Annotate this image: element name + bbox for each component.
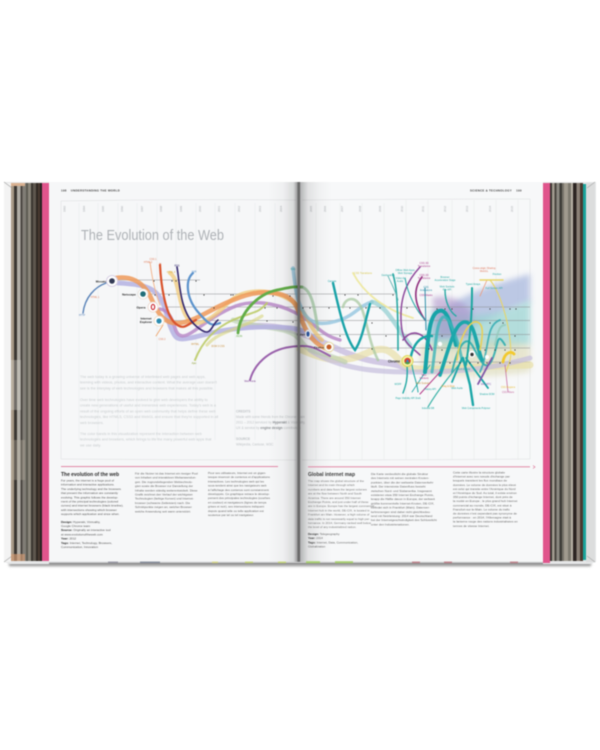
- article text: German, map: läuft. Der intensivste Datenfluss besteht: [371, 485, 426, 489]
- article text: English, map: Frankfurt am Main. However, a high volume of: [308, 513, 370, 517]
- article text: English, map: Internet and its main through which: [308, 483, 355, 487]
- article text: English: The underlying technology and the browsers: [61, 487, 121, 491]
- browser node: Mosaic: Mosaic: [96, 280, 107, 284]
- header: right page: SCIENCE & TECHNOLOGY 199: [470, 188, 522, 192]
- article text: German, map: existieren etwa 350 Internet Exchange Points,: [371, 493, 434, 497]
- year labels: 2008: [358, 205, 362, 212]
- credits block: SOURCE: [236, 437, 251, 441]
- article heading: global internet map: Global internet map: [308, 472, 355, 478]
- article text: French, map: la moitié en Europe ; le plus grand hub Internet: [453, 499, 517, 503]
- article text: German, map: kehrsmengen sind dabei nicht gleichbedeu-: [371, 510, 431, 514]
- article text: German, map: des Internets mit seinen zentralen Knoten-: [371, 476, 429, 480]
- intro text block: The web today is a growing universe of interlinked web pages and web apps,: [80, 375, 206, 379]
- article text: French, map: performance : en 2014, l'Allemagne était à: [453, 516, 511, 520]
- article heading: evolution of the web: The evolution of the web: [61, 472, 119, 478]
- technology labels, upper left: XHTML: [191, 343, 200, 346]
- article text: French: en couleur) et navigateurs (lignes de temps: [208, 500, 267, 504]
- article text: English, map: Internet hub in the world, DE-CIX, is located in: [308, 508, 370, 512]
- teal fan under chrome: [403, 366, 407, 393]
- article text: German, map: tend mit Netzleistung: 2014 war Deutschland: [371, 514, 433, 518]
- intro text block: technologies, like HTML5, CSS3 and WebGL and ensure that they're supported in all: [80, 415, 218, 419]
- article text: German: Grafik zeichnet den Verlauf der wichtigsten: [135, 492, 193, 496]
- browser node: Safari: [297, 330, 311, 338]
- article text: German: Technologien (farbige Kurven) und Internet-: [135, 497, 194, 501]
- intro text block: result of the ongoing efforts of an open web community that helps define these web: [80, 409, 216, 413]
- map metadata: Design: Telegeography: [308, 532, 339, 536]
- technology labels, upper left: HTML 2: [144, 261, 153, 264]
- technology labels, upper right: WebGL: [480, 270, 489, 273]
- technology labels, upper right: Full Screen API: [485, 287, 503, 290]
- year labels: 1997: [140, 205, 144, 212]
- year labels: 1995: [101, 205, 105, 212]
- year labels: 2003: [258, 205, 262, 212]
- browser node: Opera: [137, 302, 158, 312]
- browser node: Internet Explorer: Explorer: [140, 320, 153, 324]
- technology labels, upper left: HTTP: [79, 314, 86, 317]
- article text: French: depuis quand telle ou telle application est: [208, 509, 264, 513]
- article text: German: von Inhalten und interaktiven Webanwendun-: [135, 476, 196, 480]
- article text: English, map: Exchange Points, and just under half of these: [308, 500, 369, 504]
- browser node: Netscape: Netscape: [122, 292, 136, 296]
- article text: French, map: d'Internet avec ses nœuds d'échange par: [453, 475, 510, 479]
- technology labels, upper left: XHR: [191, 270, 197, 274]
- timeline markers: [153, 280, 517, 364]
- article metadata: Source: Originally an interactive tool: [61, 528, 111, 532]
- technology labels, upper right: Offline Web Apps: [395, 269, 415, 272]
- article text: English: with intersections showing which browser: [61, 508, 117, 512]
- page: left: [49, 182, 299, 563]
- technology labels, lower right: [394, 368, 516, 410]
- credits block: CREDITS: [236, 410, 251, 414]
- map metadata: Tags: Internet, Data, Communication,: [308, 540, 358, 544]
- article text: French: pement des principales technologies (courbes: [208, 496, 270, 500]
- gutter shading: [268, 182, 332, 563]
- article text: English, map: formance. In 2014, Germany ranked well below: [308, 521, 372, 525]
- article text: German, map: knapp die Hälfte davon in Europa; der weltweit: [371, 497, 435, 501]
- technology labels, upper right: Browser: [440, 276, 450, 279]
- map metadata: Globalization: [308, 545, 326, 549]
- technology labels, upper left: CSS 2: [159, 338, 166, 341]
- article text: French: grises et noir), ses intersections indiquent: [208, 505, 264, 509]
- article text: French: à l'affichage des contenus sont constamment: [208, 488, 269, 492]
- technology labels, upper right: Video &: [396, 277, 405, 280]
- technology labels, upper right: Canvas: [328, 280, 337, 283]
- article metadata: Design: Hyperakt, Vizzuality,: [61, 520, 100, 524]
- article text: English, map: are in Europe. Europe has the largest commercial: [308, 504, 374, 508]
- year labels: 1999: [179, 205, 183, 212]
- technology labels, upper left: Ajax: [192, 362, 197, 365]
- browser node: Chrome: Chrome: [388, 359, 400, 363]
- intro text block: The color bands in this visualization represent the interaction between web: [80, 432, 202, 436]
- article metadata: Year: 2012: [61, 537, 76, 541]
- technology labels, lower right: Web Sockets: [416, 382, 431, 385]
- technology labels, upper right: CSS Transitions: [354, 272, 373, 275]
- book cover: [4, 182, 596, 564]
- article text: French, map: lesquels transitent les flux mondiaux de: [453, 479, 507, 483]
- technology labels, upper right: [328, 262, 503, 297]
- browser node: Safari: Safari: [297, 332, 305, 336]
- intro text block: create new generations of useful and immersive web experiences. Today's web is a: [80, 404, 217, 408]
- article text: French, map: et l'Amérique du Sud. Au total, il existe environ: [453, 491, 517, 495]
- article text: German: browser (schwarze Zeitleisten) nach. Die: [135, 501, 190, 505]
- year labels: 1996: [120, 205, 124, 212]
- article text: English, map: numbers and data flows the largest volumes: [308, 487, 367, 491]
- mini browser nodes: [438, 342, 489, 359]
- browser timelines: [118, 280, 530, 362]
- technology labels, upper left: CSS 1: [150, 258, 157, 261]
- article text: French, map: termes de vitesse Internet.: [453, 524, 490, 528]
- article text: German: gen. Die zugrundeliegenden Webtechnolo-: [135, 480, 193, 484]
- technology labels, upper left: RSS: [175, 264, 180, 268]
- article text: French: développés. Ce graphique retrace le dévelop-: [208, 492, 270, 496]
- year labels: 2012: [443, 205, 447, 212]
- credits block: Made with some friends from the Chrome team: [236, 415, 305, 419]
- page stack: left: [11, 183, 42, 561]
- article text: French, map: de données n'est cependant pas synonyme de: [453, 512, 517, 516]
- page edge: right teal: [583, 184, 586, 560]
- technology labels, upper right: CSS: [423, 286, 429, 289]
- page: right: [299, 182, 543, 563]
- year labels: 2015: [510, 205, 514, 212]
- article text: German, map: unter den Industrienationen.: [371, 522, 410, 526]
- article text: French: interactives. Les technologies web qui les: [208, 479, 265, 483]
- article text: English: curves) and internet browsers (black timeline),: [61, 504, 123, 508]
- technology labels, lower right: Web: [422, 374, 427, 377]
- year labels: 2010: [400, 205, 404, 212]
- year labels: 2002: [237, 205, 241, 212]
- article text: German, map: Die Karte verdeutlicht die globale Struktur: [371, 472, 428, 476]
- year labels: [62, 205, 514, 212]
- technology labels, lower right: Web Components Polymer: [462, 407, 490, 410]
- technology labels, lower right: Page Visibility API Draft: [395, 397, 421, 400]
- page edge: right pink: [543, 183, 550, 563]
- article text: English, map: data traffic is not necessarily equal to high per-: [308, 517, 370, 521]
- technology labels, upper left: JS: [159, 263, 162, 266]
- pink rule: left: [61, 466, 278, 468]
- technology labels, upper right: Geolocation: [381, 274, 395, 277]
- year labels: 2004: [279, 205, 283, 212]
- technology labels, upper right: Web Storage: [398, 272, 413, 275]
- article text: English, map: America. There are around 350 Internet: [308, 496, 361, 500]
- article text: English, map: the level of any industrialized nation.: [308, 525, 357, 529]
- intro text block: technologies and browsers, which brings to life the many powerful web apps that: [80, 438, 211, 442]
- article text: English: supports which application and since when.: [61, 512, 120, 516]
- browser node: Chrome: [388, 356, 413, 366]
- technology labels, lower right: CSS Filters: [502, 391, 515, 394]
- page bottom edge with colour flecks: [49, 561, 543, 564]
- article text: French, map: la lanterne rouge des nations industrialisées en: [453, 520, 518, 524]
- browser node: Internet Explorer: [140, 316, 164, 326]
- intro text block: see is the interplay of web technologies and browsers that makes all this possible.: [80, 386, 214, 390]
- chart: evolution of the web: [79, 258, 530, 410]
- technology labels, upper right: Web Sockets: [440, 286, 455, 288]
- pink rule: right: [308, 466, 535, 468]
- article metadata: Communication, Innovation: [61, 545, 98, 549]
- article text: French, map: commercial au monde, DE-CIX, est situé à: [453, 503, 512, 507]
- article metadata: Tags: Internet, Technology, Browsers,: [61, 541, 112, 545]
- article metadata: Google Chrome team: [61, 524, 91, 528]
- browser node: Firefox: [314, 342, 334, 352]
- article text: French: sous-tendent ainsi que les navigateurs web: [208, 484, 267, 488]
- technology labels, upper right: Typed Arrays: [466, 283, 481, 286]
- title: The Evolution of the Web: [81, 227, 224, 244]
- article text: German, map: größte kommerzielle Internet-Knoten, DE-CIX,: [371, 501, 434, 505]
- technology labels, lower right: Shadow DOM: [480, 393, 494, 396]
- article text: German: Schnittpunkte zeigen an, welcher Browser: [135, 505, 192, 509]
- browser node: Opera: Opera: [137, 305, 146, 309]
- technology labels, upper right: Transforms: [418, 277, 431, 280]
- intro text block: we use daily.: [80, 443, 101, 447]
- article text: German: welche Anwendung seit wann unterstützt.: [135, 509, 191, 513]
- page edge: left pink: [42, 183, 49, 561]
- article text: English, map: The map shows the global structure of the: [308, 479, 364, 483]
- intro text block: teeming with videos, photos, and interactive content. What the average user doesn't: [80, 381, 217, 385]
- article text: German: Für die Nutzer ist das Internet ein riesiger Pool: [135, 472, 198, 476]
- article text: German: Inhalte werden ständig weiterentwickelt. Diese: [135, 488, 198, 492]
- technology labels, upper right: Animations: [420, 289, 433, 292]
- technology labels, upper right: Acceleration Stage: [434, 279, 456, 282]
- technology labels, lower right: Touch Events: [456, 368, 471, 371]
- year labels: 2014: [488, 205, 492, 212]
- browser node: Netscape: [122, 289, 148, 299]
- technology labels, upper left: JSON: [236, 335, 242, 338]
- technology labels, upper right: File API: [443, 288, 452, 292]
- article text: French: Pour ses utilisateurs, Internet est un gigan-: [208, 471, 266, 475]
- year labels: 2001: [217, 205, 221, 212]
- background washes: [420, 274, 530, 376]
- credits block: 2011 – 2012 serviced by Hyperakt & Vizzuality,: [236, 420, 305, 424]
- technology labels, upper left: HTML 4: [167, 271, 176, 274]
- technology labels, upper right: Flexbox: [493, 273, 502, 276]
- article text: German, map: befindet sich in Frankfurt (Main). Datenver-: [371, 506, 430, 510]
- year labels: 2005: [309, 205, 313, 212]
- article text: English: ment of the principal technologies (colored: [61, 500, 119, 504]
- technology labels, lower right: History API: [424, 388, 436, 391]
- technology labels, lower right: WOFF: [394, 383, 402, 386]
- article text: English: For years, the internet is a huge pool of: [61, 478, 114, 482]
- header: left page: 198 UNDERSTANDING THE WORLD: [61, 188, 120, 192]
- browser node: Internet Explorer: Internet: [140, 316, 152, 320]
- technology labels, lower right: Web Audio: [451, 387, 463, 390]
- technology labels, lower right: Workers: [420, 377, 429, 380]
- article text: French: soutenue par tel ou tel navigateur.: [208, 513, 254, 517]
- year labels: 1998: [159, 205, 163, 212]
- book shadow: [9, 563, 591, 566]
- technology labels, lower right: Web RTC: [481, 383, 491, 386]
- technology labels, upper right: CSS 2D: [419, 274, 429, 277]
- chart panel frame: [61, 199, 530, 460]
- technology labels, lower right: CSS Regions: [501, 386, 516, 389]
- technology labels, upper right: Transforms: [418, 265, 431, 268]
- browser node: Mosaic: [96, 276, 118, 286]
- year labels: 1993: [62, 205, 66, 212]
- browser node: Firefox: Firefox: [314, 345, 324, 349]
- article text: German, map: zwischen Nord- und Südamerika. Insgesamt: [371, 489, 432, 493]
- article text: French, map: est celui qui transite entre l'Amérique du Nord: [453, 487, 516, 491]
- year labels: 2011: [421, 206, 425, 212]
- article text: French, map: Cette carte illustre la structure globale: [453, 470, 505, 474]
- article text: French, map: données. Le volume de données le plus élevé: [453, 483, 516, 487]
- year labels: 2006: [323, 205, 327, 212]
- article text: German: gien sowie die Browser zur Darstellung der: [135, 484, 193, 488]
- technology labels, upper left: Web Fonts: [244, 380, 257, 383]
- technology labels, upper left: SVG: [290, 268, 296, 271]
- article text: English, map: are at the flow between North and South: [308, 492, 362, 496]
- intro text block: Over time web technologies have evolved to give web developers the ability to: [80, 398, 208, 402]
- technology curves, saturated: [83, 262, 514, 407]
- technology labels, upper right: Audio: [397, 280, 404, 283]
- technology labels, lower right: Indexed DB: [422, 407, 435, 410]
- technology labels, upper left: [79, 258, 296, 383]
- year labels: 1994: [82, 205, 86, 212]
- article text: English: that present the information are constantly: [61, 491, 118, 495]
- credits block: UX & service by engine design contributors: [236, 426, 301, 430]
- page stack: right: [550, 183, 583, 561]
- article text: German, map: punkten, über die der weltweite Datenverkehr: [371, 480, 433, 484]
- intro text block: web browsers.: [80, 421, 104, 425]
- year labels: 2009: [378, 205, 382, 212]
- technology labels, upper right: CSS 3D: [419, 262, 429, 265]
- year labels: 2007: [340, 205, 344, 212]
- technology curves, pale: [116, 268, 530, 372]
- technology labels, upper left: DOM 3 CSS: [211, 345, 225, 348]
- article metadata: at www.evolutionoftheweb.com: [61, 532, 103, 536]
- technology labels, upper right: Cross-origin Sharing: [473, 267, 496, 270]
- article text: English: information and interactive applications.: [61, 483, 115, 487]
- technology labels, lower right: Drag & Drop: [441, 385, 455, 388]
- year labels: 2013: [465, 205, 469, 212]
- article text: French, map: 350 points d'échange Internet, dont près de: [453, 495, 513, 499]
- year labels: 2000: [198, 205, 202, 212]
- map metadata: Year: 2014: [308, 536, 323, 540]
- article text: English: evolving. This graphic follows the develop-: [61, 495, 118, 499]
- technology labels, upper right: CSS Masks: [419, 294, 433, 297]
- technology labels, upper left: HTML 1: [91, 296, 100, 299]
- article text: French, map: Francfort-sur-le-Main. Le volume du trafic: [453, 507, 510, 511]
- article text: German, map: bei der Internetgeschwindigkeit des Schlusslicht: [371, 518, 437, 522]
- article text: French: tesque réservoir de contenus et d'applications: [208, 475, 270, 479]
- credits block: Wikipedia, Caniuse, W3C: [236, 442, 274, 446]
